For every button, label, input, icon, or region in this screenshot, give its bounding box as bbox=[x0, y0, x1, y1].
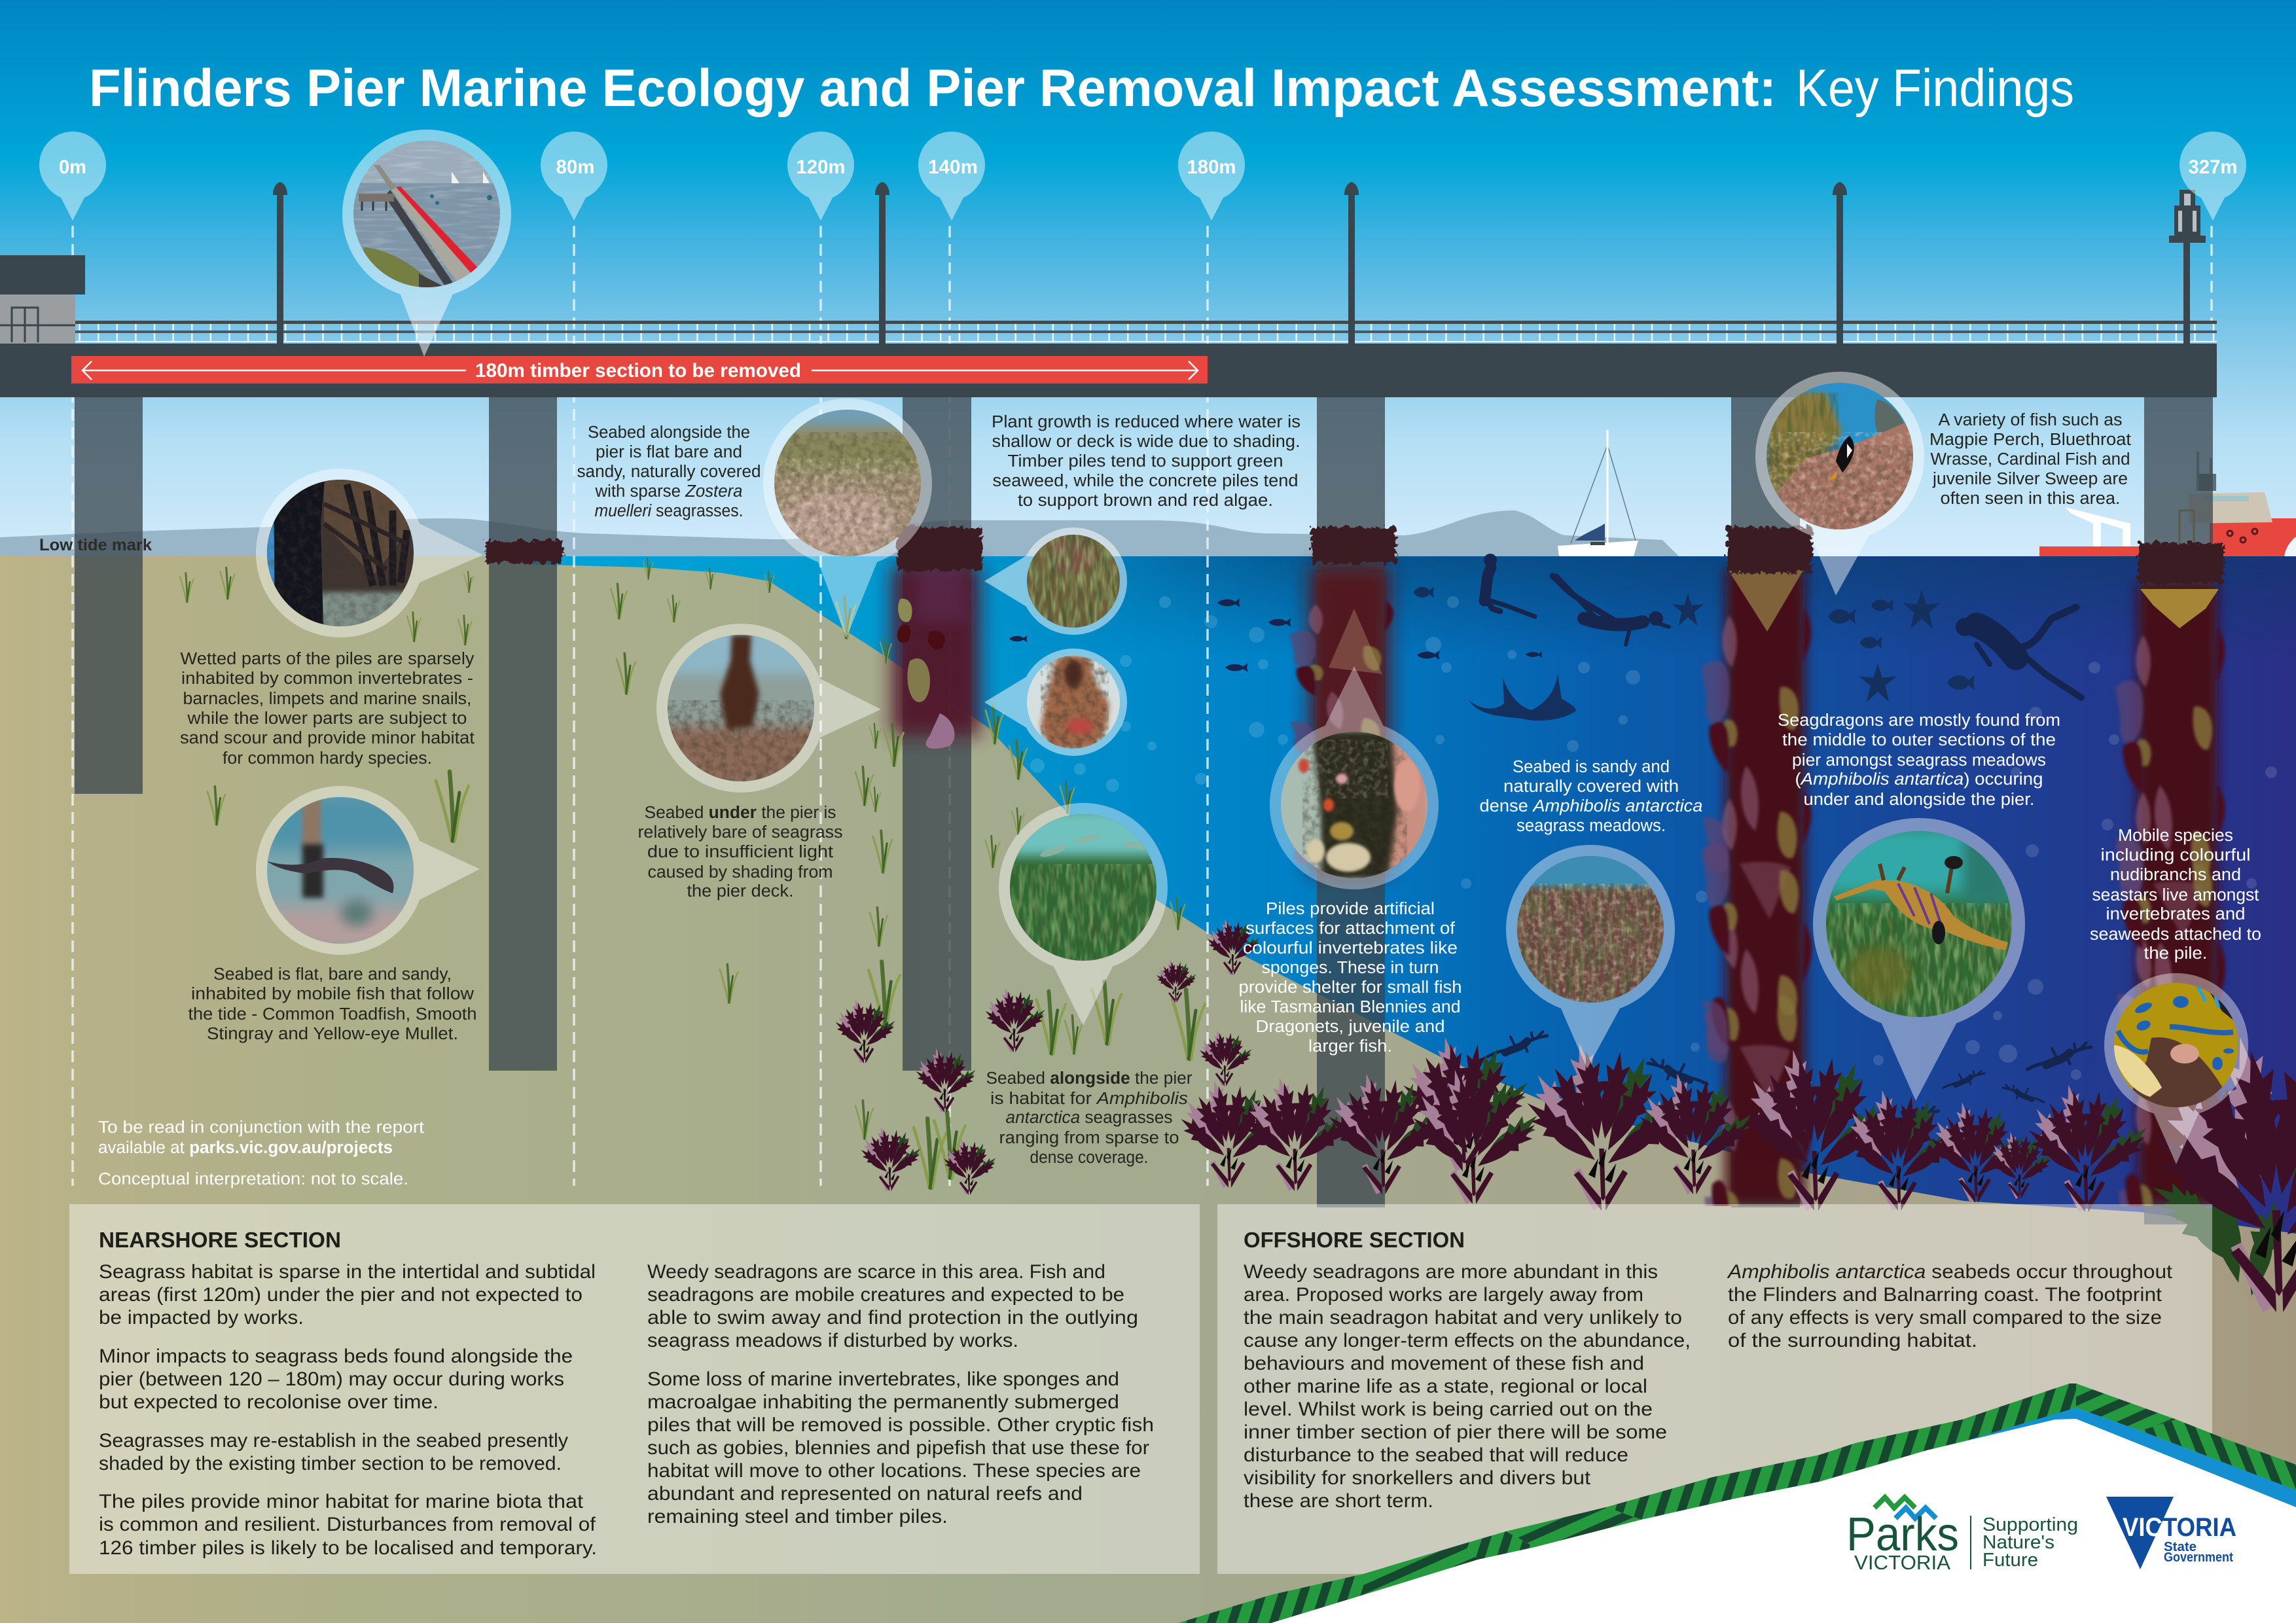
text: variety of fish: often seen in this area. bbox=[1940, 490, 2121, 508]
text: wetted parts of piles bbox=[180, 650, 475, 768]
text block: nearshore column 2: piles that will be removed is possible. Other cryptic fish bbox=[647, 1414, 1154, 1436]
text: plant growth: Timber piles tend to support green bbox=[1008, 452, 1283, 471]
text: seadragons bbox=[1778, 711, 2060, 809]
photo: reef fish over coral bbox=[1767, 383, 1914, 530]
text block: nearshore column 1: Minor impacts to seagrass beds found alongside the bbox=[99, 1346, 573, 1367]
photo pin: red algae on pile bbox=[984, 649, 1127, 756]
text: sandy seabed bbox=[1479, 758, 1703, 835]
pile growth: marine encrustation bbox=[891, 563, 2225, 1246]
text: artificial surfaces: provide shelter for small fish bbox=[1238, 978, 1462, 997]
callout: seabed alongside (Amphibolis) bbox=[986, 803, 1193, 1167]
text block: nearshore column 2: able to swim away and find protection in the outlying bbox=[647, 1307, 1138, 1329]
text: wetted parts of piles: inhabited by common invertebrates - bbox=[181, 669, 473, 688]
text: variety of fish: Magpie Perch, Bluethroat bbox=[1929, 431, 2131, 449]
callout: plant growth and algae on piles bbox=[984, 413, 1300, 756]
text block: nearshore column 2: habitat will move to other locations. These species are bbox=[647, 1460, 1141, 1482]
text: seabed under pier bbox=[637, 804, 843, 901]
text: variety of fish: A variety of fish such as bbox=[1939, 411, 2122, 429]
marker: 140m: 140m bbox=[928, 156, 978, 178]
text: artificial surfaces: Piles provide artificial bbox=[1266, 900, 1435, 918]
text block: nearshore column 1: areas (first 120m) under the pier and not expected to bbox=[99, 1284, 583, 1306]
photo: under pier bbox=[267, 480, 414, 632]
text: seabed alongside Amphibolis: dense coverage. bbox=[1030, 1149, 1148, 1167]
text block: nearshore column 1: 126 timber piles is likely to be localised and temporary. bbox=[99, 1537, 597, 1559]
marker: 80m: 80m bbox=[556, 156, 594, 178]
text: seabed alongside Amphibolis: Seabed alongside the pier bbox=[986, 1069, 1193, 1088]
text: flat sandy seabed: Seabed is flat, bare and sandy, bbox=[213, 965, 452, 984]
photo: nudibranch bbox=[2114, 983, 2238, 1107]
text: plant growth: Plant growth is reduced where water is bbox=[992, 413, 1300, 431]
callout: piles as artificial surfaces bbox=[1238, 666, 1462, 1056]
text block: offshore column 1: the main seadragon habitat and very unlikely to bbox=[1244, 1307, 1682, 1329]
text: variety of fish bbox=[1929, 411, 2131, 508]
text: variety of fish: juvenile Silver Sweep are bbox=[1932, 470, 2128, 488]
sky background bbox=[0, 0, 2296, 563]
text: mobile species bbox=[2090, 827, 2261, 963]
text: seabed under pier: relatively bare of seagrass bbox=[637, 823, 843, 842]
water bbox=[419, 556, 2296, 1243]
text block: nearshore column 1: is common and resilient. Disturbances from removal of bbox=[99, 1514, 596, 1535]
pier piles bbox=[75, 393, 2213, 1224]
kelp meadow: offshore bbox=[1175, 1034, 2296, 1312]
text: sandy seabed: seagrass meadows. bbox=[1516, 817, 1666, 835]
text: seabed under pier: caused by shading from bbox=[648, 863, 833, 882]
text: seadragons: (Amphibolis antartica ) occuring bbox=[1795, 770, 2043, 789]
marker: 180m: 180m bbox=[1187, 156, 1236, 178]
scuba diver silhouette bbox=[1956, 607, 2081, 698]
text block: offshore column 1: behaviours and movement of these fish and bbox=[1244, 1353, 1644, 1374]
text block: nearshore column 1: Seagrass habitat is sparse in the intertidal and subtidal bbox=[99, 1261, 596, 1283]
text block: offshore column 1: inner timber section of pier there will be some bbox=[1244, 1421, 1667, 1443]
callout: seabed under the pier bbox=[637, 624, 881, 901]
text block: offshore column 1: these are short term. bbox=[1244, 1490, 1433, 1512]
text: seadragons: under and alongside the pier. bbox=[1804, 791, 2034, 809]
callout: seabed alongside the pier (Zostera) bbox=[577, 399, 932, 638]
callout: sandy seabed with Amphibolis meadows bbox=[1479, 758, 1703, 1069]
logo: Victoria State Government: Government bbox=[2164, 1550, 2233, 1565]
text block: offshore column 1: area. Proposed works are largely away from bbox=[1244, 1284, 1643, 1306]
text block: offshore column 1 bbox=[1244, 1261, 1691, 1512]
logo: Victoria State Government bbox=[2106, 1497, 2236, 1569]
text: artificial surfaces: larger fish. bbox=[1308, 1037, 1392, 1056]
seadragon silhouettes bbox=[1488, 1031, 2091, 1132]
text: seabed under pier: the pier deck. bbox=[687, 882, 793, 901]
text: flat sandy seabed: Stingray and Yellow-eye Mullet. bbox=[207, 1025, 458, 1043]
text block: nearshore column 1: but expected to recolonise over time. bbox=[99, 1391, 439, 1413]
text: plant growth: shallow or deck is wide due to shading. bbox=[992, 433, 1300, 451]
text block: nearshore column 1: The piles provide minor habitat for marine biota that bbox=[99, 1491, 584, 1512]
text: flat sandy seabed: the tide - Common Toadfish, Smooth bbox=[188, 1005, 476, 1024]
text block: nearshore column 1: pier (between 120 – 180m) may occur during works bbox=[99, 1368, 564, 1390]
footnote: report reference bbox=[98, 1118, 424, 1188]
text block: nearshore column 2: Weedy seadragons are scarce in this area. Fish and bbox=[647, 1261, 1105, 1283]
text: seadragons: pier amongst seagrass meadows bbox=[1792, 751, 2046, 770]
text: wetted parts of piles: barnacles, limpets and marine snails, bbox=[183, 690, 471, 708]
logo: Parks Victoria: Future bbox=[1982, 1550, 2038, 1571]
title: Key Findings bbox=[1796, 59, 2074, 118]
sailing boat bbox=[1558, 430, 1638, 556]
text block: nearshore column 2: Some loss of marine invertebrates, like sponges and bbox=[647, 1368, 1119, 1390]
distance dashed guide lines bbox=[73, 226, 2212, 1186]
text block: nearshore column 1: be impacted by works. bbox=[99, 1307, 304, 1329]
text block: offshore column 2 bbox=[1727, 1261, 2173, 1351]
text: seabed alongside pier: pier is flat bare and bbox=[596, 443, 742, 461]
bubbles bbox=[1030, 596, 2277, 1105]
text block: offshore column 1: disturbance to the seabed that will reduce bbox=[1244, 1444, 1628, 1466]
text: mobile species: including colourful bbox=[2101, 846, 2250, 865]
distance markers bbox=[39, 132, 2246, 221]
banner: 180m timber section to be removed: 180m timber section to be removed bbox=[475, 360, 801, 382]
logo: Victoria State Government: State bbox=[2164, 1540, 2197, 1554]
kelp plants: nearshore bbox=[832, 918, 1263, 1195]
text: plant growth bbox=[992, 413, 1300, 510]
text block: nearshore column 1 bbox=[99, 1261, 597, 1559]
text: artificial surfaces: like Tasmanian Blennies and bbox=[1240, 998, 1461, 1016]
footnote: report reference: To be read in conjunction with the report bbox=[98, 1118, 424, 1137]
heading: nearshore: NEARSHORE SECTION bbox=[99, 1228, 341, 1252]
seagrass plants bbox=[180, 558, 1205, 1188]
callout: mobile species and nudibranchs bbox=[2090, 827, 2261, 1164]
text: plant growth: to support brown and red algae. bbox=[1018, 491, 1273, 510]
logo: Parks Victoria: Supporting bbox=[1982, 1514, 2078, 1535]
callout: flat sandy seabed with stingray bbox=[188, 786, 480, 1043]
text: seabed alongside Amphibolis: is habitat for Amphibolis bbox=[990, 1090, 1188, 1108]
text: flat sandy seabed: inhabited by mobile fish that follow bbox=[191, 985, 475, 1003]
text: seabed under pier: due to insufficient light bbox=[647, 843, 833, 861]
text block: nearshore column 2: remaining steel and timber piles. bbox=[647, 1506, 948, 1527]
snorkeller silhouette bbox=[1484, 554, 1535, 616]
text block: offshore column 2: the Flinders and Balnarring coast. The footprint bbox=[1728, 1284, 2162, 1306]
marker: 140m bbox=[918, 132, 985, 221]
text: sandy seabed: Seabed is sandy and bbox=[1513, 758, 1670, 776]
text: seabed alongside Amphibolis: antarctica seagrasses bbox=[1005, 1109, 1173, 1127]
text: mobile species: nudibranchs and bbox=[2110, 866, 2241, 884]
photo: bare seabed under pier bbox=[662, 628, 819, 785]
pier entry building bbox=[0, 255, 85, 344]
marker: 120m bbox=[787, 132, 854, 221]
photo: weedy seadragon bbox=[1820, 825, 2018, 1017]
text block: offshore column 1: Weedy seadragons are more abundant in this bbox=[1244, 1261, 1658, 1283]
text: seabed alongside pier: muelleri seagrasses. bbox=[594, 502, 744, 520]
text: artificial surfaces: colourful invertebrates like bbox=[1243, 939, 1458, 957]
text: seadragons: Seagdragons are mostly found from bbox=[1778, 711, 2060, 730]
text block: nearshore column 2: seadragons are mobile creatures and expected to be bbox=[647, 1284, 1124, 1306]
text: seabed alongside pier: sandy, naturally covered bbox=[577, 463, 761, 481]
photo: sparse seagrass bbox=[769, 399, 926, 556]
marker: 0m: 0m bbox=[59, 156, 86, 178]
text: seabed under pier: Seabed under the pier is bbox=[644, 804, 836, 822]
text: seabed alongside pier: with sparse Zostera bbox=[594, 482, 742, 501]
distant hills bbox=[0, 510, 1679, 556]
text: seabed alongside pier: Seabed alongside the bbox=[588, 423, 750, 442]
photo: Amphibolis meadow bbox=[1512, 851, 1669, 1003]
text: artificial surfaces: surfaces for attachment of bbox=[1246, 919, 1456, 938]
text block: nearshore column 1: Seagrasses may re-establish in the seabed presently bbox=[99, 1430, 568, 1452]
logo: Parks Victoria: Nature's bbox=[1982, 1532, 2054, 1553]
text: sandy seabed: dense Amphibolis antarctica bbox=[1479, 797, 1703, 815]
text: wetted parts of piles: while the lower parts are subject to bbox=[187, 709, 467, 728]
panel: offshore section bbox=[1217, 1204, 2212, 1574]
text block: nearshore column 2: abundant and represented on natural reefs and bbox=[647, 1483, 1083, 1505]
corner: white mountain logo area bbox=[1178, 1383, 2296, 1623]
text: mobile species: seaweeds attached to bbox=[2090, 925, 2261, 944]
text: artificial surfaces bbox=[1238, 900, 1462, 1056]
photo pin: green seaweed on pile bbox=[984, 527, 1127, 635]
marker: 327m: 327m bbox=[2189, 156, 2237, 178]
marker: 120m: 120m bbox=[796, 156, 846, 178]
text: flat sandy seabed bbox=[188, 965, 476, 1043]
text block: nearshore column 1: shaded by the existing timber section to be removed. bbox=[99, 1453, 562, 1474]
text: wetted parts of piles: Wetted parts of the piles are sparsely bbox=[181, 650, 475, 668]
panel: nearshore section bbox=[69, 1204, 1200, 1574]
callout: seadragons bbox=[1778, 711, 2060, 1101]
logo: Parks Victoria bbox=[1846, 1497, 2078, 1574]
text block: offshore column 2: of any effects is very small compared to the size bbox=[1728, 1307, 2162, 1329]
logo: Victoria State Government: VICTORIA bbox=[2123, 1513, 2236, 1542]
photo callout: aerial view of pier bbox=[342, 130, 511, 357]
text block: nearshore column 2: such as gobies, blennies and pipefish that use these for bbox=[647, 1437, 1149, 1459]
callout: variety of fish bbox=[1755, 372, 2131, 596]
text: seabed alongside Amphibolis bbox=[986, 1069, 1193, 1167]
text: seadragons: the middle to outer sections of the bbox=[1782, 731, 2056, 749]
pier handrail bbox=[0, 321, 2217, 342]
photo: encrusted pile bbox=[1281, 732, 1427, 878]
text block: offshore column 1: cause any longer-term effects on the abundance, bbox=[1244, 1330, 1691, 1351]
barnacle bands at tide mark bbox=[482, 525, 2221, 581]
photo: dense seagrass meadow bbox=[1005, 809, 1162, 962]
logo: Parks Victoria: Parks bbox=[1846, 1508, 1959, 1561]
marker: 80m bbox=[541, 132, 607, 221]
text: artificial surfaces: sponges. These in turn bbox=[1262, 959, 1439, 977]
seabed sand bbox=[0, 556, 2296, 1623]
freediver silhouette bbox=[1552, 576, 1669, 645]
banner: 180m timber section to be removed bbox=[71, 356, 1208, 383]
manta ray bbox=[1469, 674, 1576, 721]
text: artificial surfaces: Dragonets, juvenile and bbox=[1255, 1018, 1445, 1036]
callout: wetted parts of piles bbox=[180, 469, 483, 768]
marker: 0m bbox=[39, 132, 106, 221]
work ship bbox=[2039, 452, 2296, 556]
text block: offshore column 2: of the surrounding habitat. bbox=[1728, 1330, 1977, 1351]
label: low tide mark: Low tide mark bbox=[39, 536, 152, 554]
marker: 180m bbox=[1178, 132, 1245, 221]
text block: offshore column 1: level. Whilst work is being carried out on the bbox=[1244, 1399, 1653, 1420]
text: mobile species: seastars live amongst bbox=[2092, 886, 2259, 904]
text: mobile species: the pile. bbox=[2144, 944, 2207, 963]
text block: nearshore column 2 bbox=[647, 1261, 1154, 1527]
title: Flinders Pier Marine Ecology and Pier Removal Impact Assessment: bbox=[89, 59, 1776, 118]
text: seabed alongside pier bbox=[577, 423, 761, 520]
lighthouse light at pier end bbox=[2169, 190, 2206, 344]
footnote: report reference: Conceptual interpretation: not to scale. bbox=[98, 1170, 408, 1188]
footnote: report reference: available at parks.vic.gov.au/projects bbox=[98, 1139, 393, 1157]
text: seabed alongside Amphibolis: ranging from sparse to bbox=[999, 1129, 1179, 1147]
lamp posts bbox=[273, 182, 1847, 344]
text: wetted parts of piles: for common hardy species. bbox=[223, 749, 432, 768]
text: plant growth: seaweed, while the concrete piles tend bbox=[992, 472, 1299, 490]
photo: stingray bbox=[267, 797, 414, 944]
text block: offshore column 1: other marine life as a state, regional or local bbox=[1244, 1376, 1647, 1397]
text: wetted parts of piles: sand scour and provide minor habitat bbox=[180, 729, 475, 747]
fish silhouettes bbox=[1009, 587, 1975, 702]
text block: nearshore column 2: macroalgae inhabiting the permanently submerged bbox=[647, 1391, 1119, 1413]
logo: Parks Victoria: VICTORIA bbox=[1854, 1551, 1950, 1574]
heading: offshore: OFFSHORE SECTION bbox=[1244, 1228, 1465, 1252]
text: mobile species: Mobile species bbox=[2118, 827, 2233, 845]
pier deck bbox=[0, 344, 2217, 397]
marker: 327m bbox=[2179, 132, 2246, 221]
text block: offshore column 2: Amphibolis antarctica seabeds occur throughout bbox=[1727, 1261, 2173, 1283]
text: sandy seabed: naturally covered with bbox=[1503, 777, 1679, 796]
text block: nearshore column 2: seagrass meadows if disturbed by works. bbox=[647, 1330, 1018, 1351]
text: mobile species: invertebrates and bbox=[2106, 905, 2245, 923]
text block: offshore column 1: visibility for snorkellers and divers but bbox=[1244, 1467, 1591, 1489]
text: variety of fish: Wrasse, Cardinal Fish and bbox=[1931, 450, 2130, 469]
